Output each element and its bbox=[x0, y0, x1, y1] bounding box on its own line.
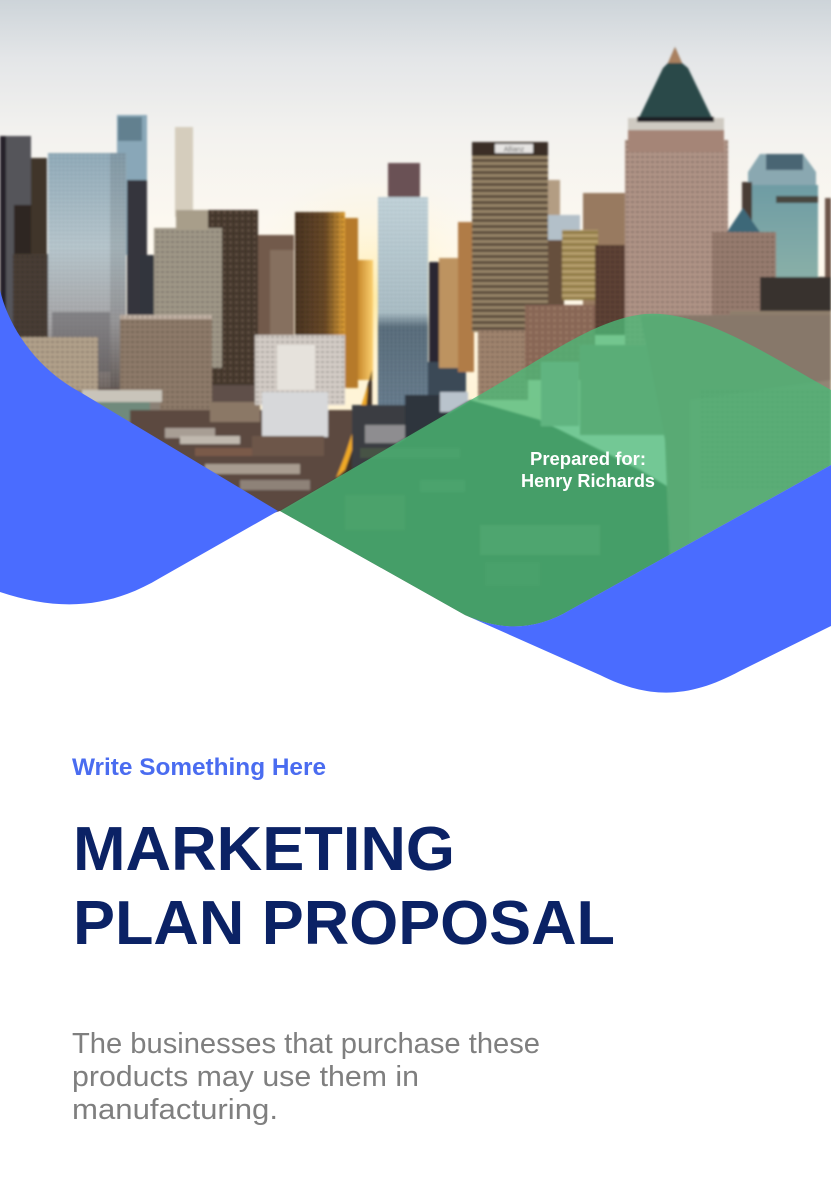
dark slab bbox=[429, 262, 439, 362]
under-green low rise bbox=[280, 400, 690, 630]
prepared for label: Prepared for: bbox=[530, 449, 646, 469]
prepared for label bbox=[521, 449, 655, 491]
prepared for label: Henry Richards bbox=[521, 471, 655, 491]
mid distance brown towers bbox=[258, 235, 294, 345]
under-green tan buildings bbox=[664, 314, 828, 555]
title bbox=[73, 815, 615, 958]
dark band and far right blocks bbox=[825, 198, 831, 280]
blue twin tower bbox=[117, 115, 147, 255]
golden street bbox=[342, 370, 374, 475]
Allianz tower: Allianz bbox=[504, 146, 525, 154]
tan low block bbox=[20, 337, 98, 397]
blue wave: right bbox=[465, 465, 831, 693]
sky bbox=[0, 0, 831, 420]
background photo: city skyline at sunset bbox=[0, 0, 831, 630]
green translucent wave bbox=[280, 314, 831, 626]
title: PLAN PROPOSAL bbox=[73, 889, 615, 958]
buildings bbox=[0, 47, 831, 630]
backing haze block bbox=[96, 383, 256, 404]
beige tower bbox=[154, 228, 222, 368]
brick mid tower with blue roof bbox=[712, 208, 777, 316]
glass tower bbox=[48, 153, 126, 388]
under-green white blocks bbox=[541, 362, 579, 426]
dark brown tower bbox=[208, 210, 258, 385]
description bbox=[72, 1028, 540, 1126]
white buildings bbox=[255, 335, 345, 405]
description: products may use them in bbox=[72, 1061, 419, 1093]
blue wave: left bbox=[0, 290, 278, 604]
orange background tower bbox=[437, 256, 460, 370]
under-green street blocks bbox=[345, 495, 405, 530]
sun glow bbox=[345, 207, 452, 370]
teal glass tower bbox=[742, 154, 818, 280]
description: The businesses that purchase these bbox=[72, 1028, 540, 1060]
slim beige tower bbox=[175, 127, 193, 217]
blue low block bbox=[428, 362, 466, 407]
Allianz tower bbox=[472, 142, 548, 332]
foreground low rise bbox=[76, 389, 160, 422]
brick block bbox=[120, 315, 212, 415]
lower brown block bbox=[478, 330, 528, 400]
far left dark towers bbox=[0, 136, 31, 336]
main pyramid tower bbox=[625, 47, 728, 350]
title: MARKETING bbox=[73, 815, 455, 884]
description: manufacturing. bbox=[72, 1094, 278, 1126]
sunlit tower bbox=[295, 212, 345, 362]
subtitle: Write Something Here bbox=[72, 754, 326, 781]
right side mid buildings bbox=[548, 180, 560, 220]
central glass tower bbox=[388, 163, 420, 199]
